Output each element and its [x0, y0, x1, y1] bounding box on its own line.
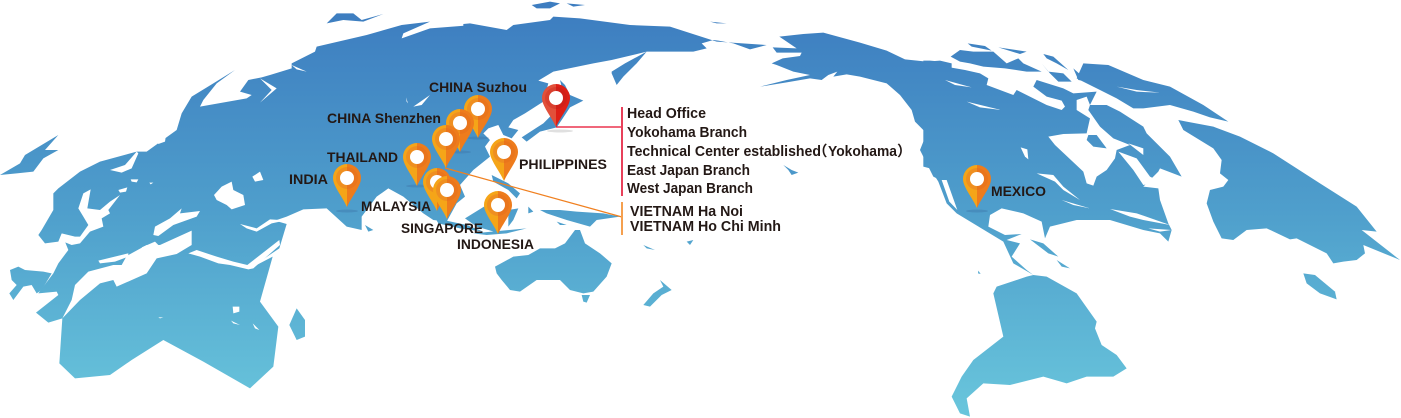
landmass: East Asia, Australia and Oceania [463, 2, 798, 307]
pin: Malaysia [423, 168, 451, 211]
pin: India [333, 164, 361, 212]
label: Philippines: PHILIPPINES [519, 156, 607, 172]
label: China Shenzhen: CHINA Shenzhen [327, 110, 441, 126]
pin: Japan head office [542, 84, 573, 132]
pin: Mexico [963, 165, 991, 212]
bracket: Vietnam [621, 202, 623, 235]
landmass: Alaska and West Canada [760, 33, 952, 180]
label: Indonesia: INDONESIA [457, 236, 534, 252]
landmass: North and South America, Greenland [923, 61, 1400, 417]
label: China Suzhou: CHINA Suzhou [429, 79, 527, 95]
text block: Japan offices: Yokohama Branch [627, 125, 747, 141]
text block: Japan offices: （ [813, 143, 828, 160]
text block: Japan offices: East Japan Branch [627, 163, 750, 179]
pin: Singapore [433, 176, 461, 219]
label: Malaysia: MALAYSIA [361, 198, 431, 214]
label: India: INDIA [289, 171, 328, 187]
text block: Japan offices [627, 106, 912, 197]
text block: Japan offices: West Japan Branch [627, 181, 753, 197]
pin: China Suzhou [464, 95, 492, 140]
text block: Japan offices: ） [897, 143, 912, 160]
pin: Philippines [490, 138, 518, 181]
label: Singapore: SINGAPORE [401, 220, 483, 236]
text block: Vietnam offices: VIETNAM Ha Noi [630, 204, 743, 220]
text block: Japan offices: Yokohama [828, 144, 898, 160]
landmass: Canadian Arctic islands [951, 43, 1228, 122]
pin: Indonesia [484, 191, 512, 234]
pin: Thailand [403, 143, 431, 188]
bracket: Japan [621, 107, 623, 196]
text block: Vietnam offices [630, 204, 781, 235]
landmass: Europe, West Asia and Africa [0, 13, 473, 388]
label: Thailand: THAILAND [327, 149, 398, 165]
connector: Vietnam [445, 168, 622, 217]
label: Mexico: MEXICO [991, 183, 1046, 199]
landmass: Southeast Asian islands [432, 175, 620, 235]
text block: Vietnam offices: VIETNAM Ho Chi Minh [630, 219, 781, 235]
pin: China Shenzhen rear [446, 109, 474, 154]
island in Hudson Strait [1087, 135, 1107, 148]
connector: Japan [556, 126, 622, 128]
seas and lakes: Europe and Africa [62, 135, 280, 330]
text block: Japan offices: Technical Center established [627, 144, 821, 160]
seas and lakes: North America [899, 80, 1172, 232]
text block: Japan offices: Head Office [627, 106, 706, 122]
pin: China Shenzhen front [432, 125, 460, 168]
seas and lakes: Asia [260, 65, 430, 107]
